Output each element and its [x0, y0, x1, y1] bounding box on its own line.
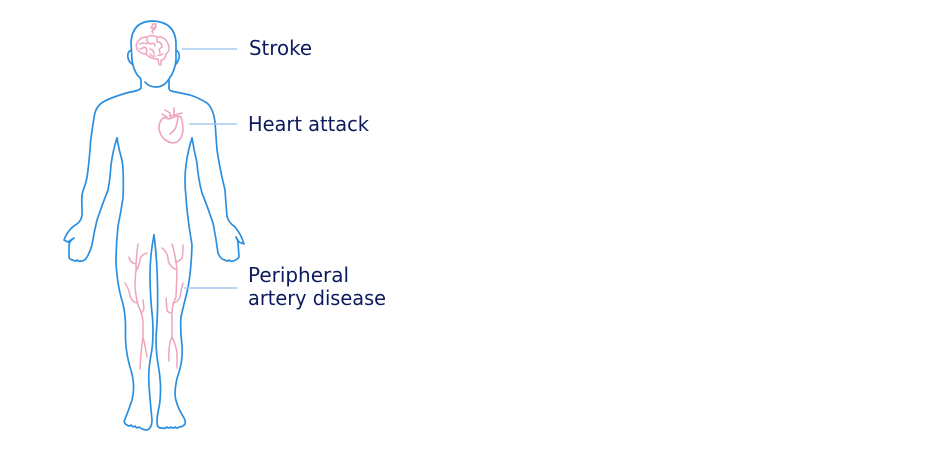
- brain folds: [140, 37, 163, 56]
- jaw: [145, 79, 169, 87]
- heart outline: [159, 116, 183, 143]
- label: heart attack: Heart attack: [248, 112, 369, 136]
- heart inner line: [170, 117, 178, 134]
- icon: lightning bolt: [151, 24, 156, 33]
- label: peripheral artery disease: [248, 263, 386, 310]
- brain outline: [136, 36, 169, 65]
- left side of torso and outer left leg: [116, 138, 154, 430]
- label: stroke: Stroke: [249, 36, 312, 60]
- brain: [136, 24, 169, 65]
- label: peripheral artery disease: Peripheral: [248, 263, 349, 287]
- body outline: [64, 21, 244, 430]
- ears: [128, 50, 132, 64]
- inner right leg and foot: [154, 138, 192, 428]
- connector: peripheral artery disease: [184, 287, 237, 289]
- right leg arteries: [162, 244, 183, 368]
- connector: stroke: [182, 48, 237, 50]
- left leg arteries: [125, 244, 147, 369]
- head and left side of neck: [131, 21, 176, 88]
- aorta and vessels: [162, 108, 182, 117]
- heart: [159, 108, 183, 143]
- left shoulder, left arm and hand: [64, 88, 141, 261]
- label: peripheral artery disease: artery disease: [248, 286, 386, 310]
- right shoulder, right arm and hand: [169, 88, 244, 261]
- connector: heart attack: [189, 123, 237, 125]
- leg arteries: [125, 244, 183, 369]
